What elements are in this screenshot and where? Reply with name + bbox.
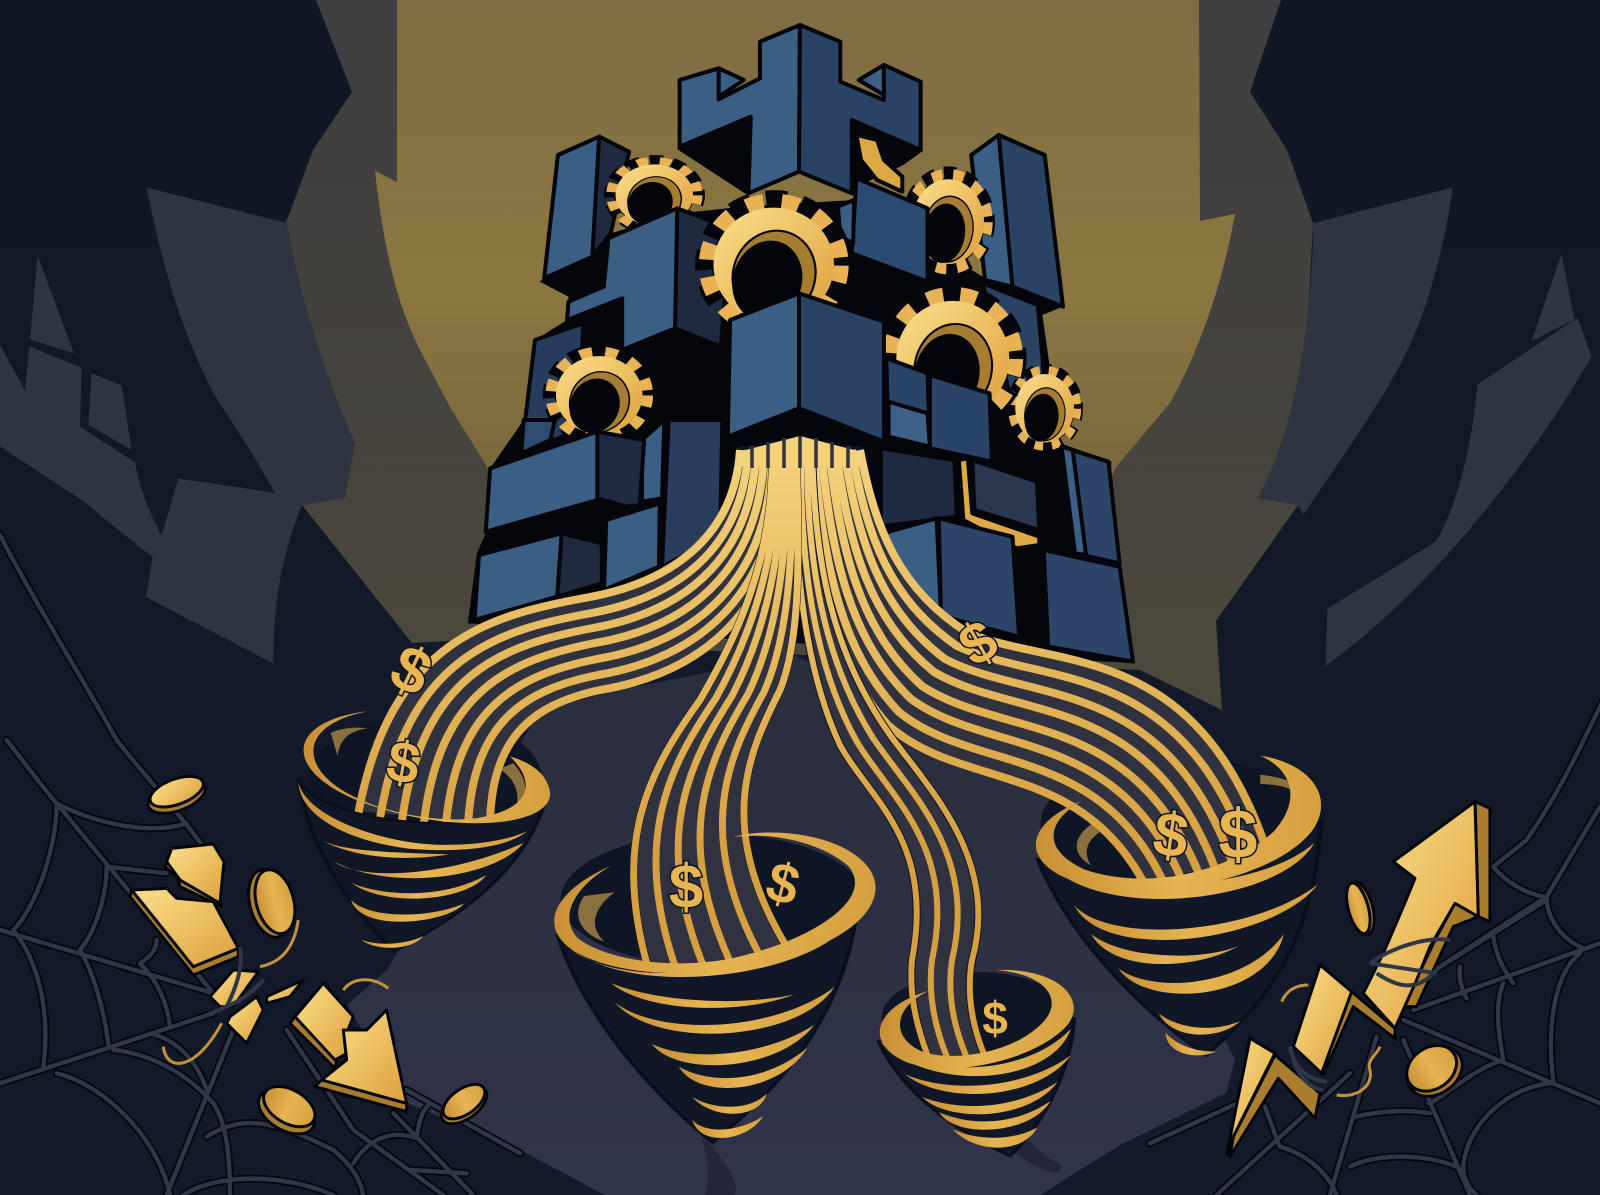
ground (347, 655, 1235, 1195)
stream: left (358, 450, 788, 828)
arrow piece: bar (130, 888, 238, 975)
tornado: left (298, 711, 550, 951)
arrow: head and shaft (1363, 802, 1490, 1028)
tornado: small (878, 970, 1074, 1156)
block: lower left column (521, 323, 583, 453)
block: left tall column (544, 137, 629, 278)
coin: lower (251, 1078, 323, 1143)
dollar signs: $ (760, 849, 806, 918)
stream: centre left (634, 450, 798, 975)
block: top battlement (680, 25, 921, 193)
icon: gear lower left (551, 351, 648, 439)
tower: silhouette (468, 200, 1135, 663)
spider web: left (0, 535, 520, 1195)
dollar signs: $ (380, 630, 443, 710)
icon: gear top right (908, 174, 988, 269)
threads (163, 920, 388, 1063)
tornado: right (1036, 756, 1321, 1055)
dollar signs: $ (982, 992, 1008, 1044)
stream: right (805, 450, 1270, 885)
arrow head (315, 1010, 407, 1112)
icon: gear fragment (856, 135, 902, 192)
stream top under the cube (738, 436, 862, 468)
block: right tall column (971, 135, 1063, 307)
broken up arrow with coins, right (1227, 802, 1490, 1157)
tornado: centre (554, 832, 876, 1143)
dollar signs: $ (1149, 799, 1193, 872)
arrow: lower zig (1227, 1038, 1320, 1157)
background rocks: left (0, 187, 355, 663)
web wraps (207, 947, 263, 1015)
block: right column (983, 283, 1047, 408)
icon: gear far right (1012, 370, 1078, 447)
block: upper left cube (567, 208, 730, 350)
spider web: right (1150, 700, 1600, 1195)
threads (1282, 985, 1380, 1096)
tornado interiors (309, 716, 1318, 1063)
web wraps (1290, 939, 1450, 1090)
dollar signs (380, 607, 1257, 1044)
golden glow (375, 0, 1235, 640)
dollar signs: $ (669, 853, 703, 922)
tower: front blocks (728, 293, 992, 462)
background band behind the glow (286, 0, 1313, 710)
broken down arrow with coins, left (130, 770, 493, 1143)
icon: gear centre (706, 201, 841, 329)
coin: right (435, 1077, 493, 1131)
stream: centre right thin (795, 450, 994, 1075)
icon: gear right (889, 294, 1016, 423)
blocks: under the central cube (886, 358, 992, 462)
block: large central cube (728, 293, 884, 442)
dollar signs: $ (382, 728, 425, 798)
dollar signs: $ (1219, 795, 1257, 873)
coin: top (143, 770, 210, 820)
block: centre right cube (838, 178, 928, 282)
coin: middle (242, 865, 301, 942)
tower: lower blocks (475, 420, 1133, 662)
tower: back blocks and gears (521, 25, 1078, 453)
arrow piece: neck (290, 983, 353, 1068)
arrow: middle zig (1293, 965, 1395, 1075)
arrow piece: top (165, 844, 224, 907)
dollar signs: $ (948, 607, 1008, 679)
tornado shadow tails (700, 1130, 1062, 1195)
tornado bodies and swirl bands (298, 711, 1321, 1156)
coin: lower (1398, 1036, 1472, 1106)
coin: upper (1342, 879, 1379, 938)
money streams (358, 450, 1270, 1075)
background rocks: right (1257, 187, 1592, 666)
arrow pieces: wrapped centre (210, 970, 303, 1043)
icon: gear top left (611, 161, 698, 229)
